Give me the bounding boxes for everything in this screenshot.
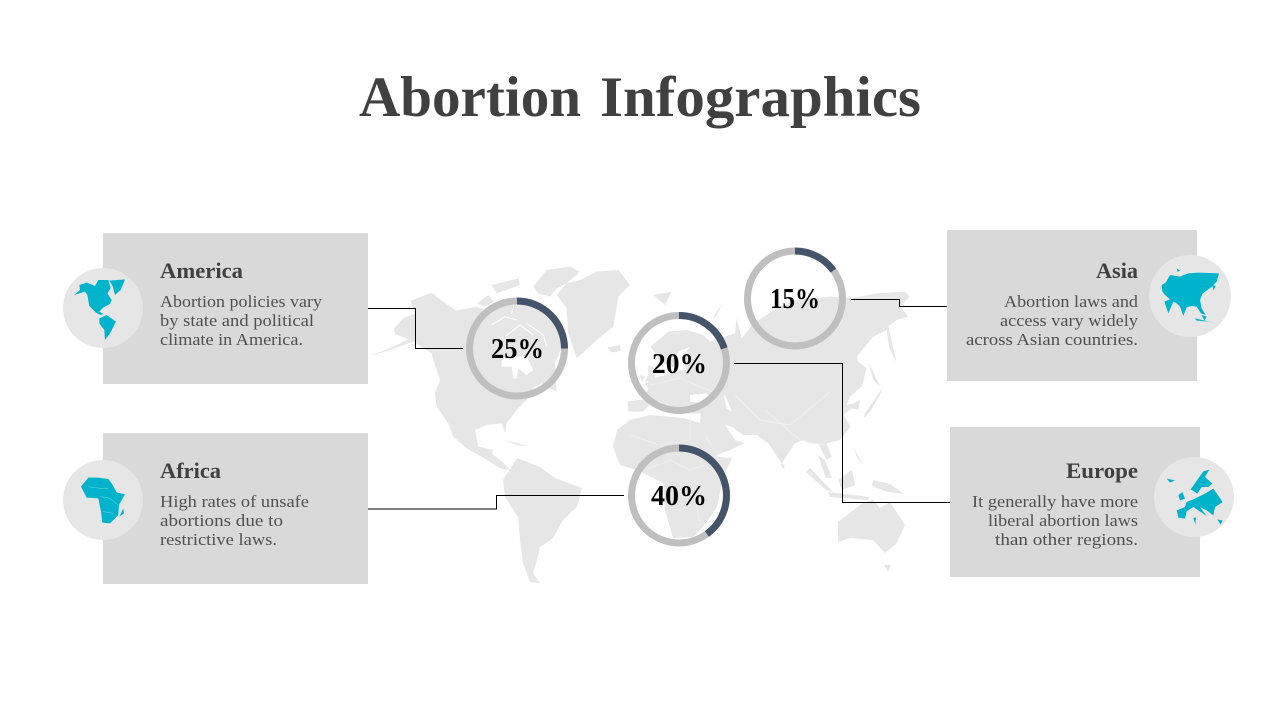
icon: Europe map (1154, 457, 1234, 537)
icon: Asia map (1149, 255, 1231, 337)
body text: access vary widely (1000, 311, 1139, 330)
body text: liberal abortion laws (988, 511, 1138, 530)
body text (160, 292, 323, 349)
ring: 20% (632, 316, 726, 410)
ring: 40%: 40% (651, 480, 707, 512)
heading: America (160, 258, 243, 283)
heading: Africa (160, 458, 221, 483)
americas north (370, 267, 630, 470)
title: Infographics (600, 66, 921, 129)
body text: than other regions. (995, 530, 1138, 549)
body text: climate in America. (160, 330, 303, 349)
eurasia (627, 292, 910, 469)
heading: Asia (1096, 258, 1138, 283)
title (359, 66, 921, 129)
icon: Africa map (63, 460, 143, 540)
map borders (630, 378, 830, 525)
body text: across Asian countries. (966, 330, 1138, 349)
panel: Africa (63, 433, 368, 584)
body text: Abortion policies vary (160, 292, 323, 311)
body text: by state and political (160, 311, 314, 330)
title: Abortion (359, 66, 581, 129)
south america, africa, oceania (503, 415, 905, 583)
connector lines (368, 300, 950, 509)
ring: 25%: 25% (491, 333, 544, 365)
ring: 25% (470, 301, 564, 396)
panel: America (63, 233, 368, 384)
body text (160, 492, 309, 549)
ring: 15% (748, 251, 842, 346)
body text: Abortion laws and (1004, 292, 1139, 311)
body text: High rates of unsafe (160, 492, 309, 511)
body text: abortions due to (160, 511, 283, 530)
world map (370, 267, 910, 583)
body text: It generally have more (972, 492, 1138, 511)
ring: 20%: 20% (652, 348, 707, 380)
ring: 40% (632, 448, 726, 543)
heading: Europe (1066, 458, 1138, 483)
body text (972, 492, 1138, 549)
panel: Europe (950, 427, 1234, 577)
body text: restrictive laws. (160, 530, 277, 549)
ring: 15%: 15% (770, 283, 820, 315)
body text (966, 292, 1139, 349)
icon: Americas map (63, 268, 143, 348)
panel: Asia (947, 230, 1231, 381)
